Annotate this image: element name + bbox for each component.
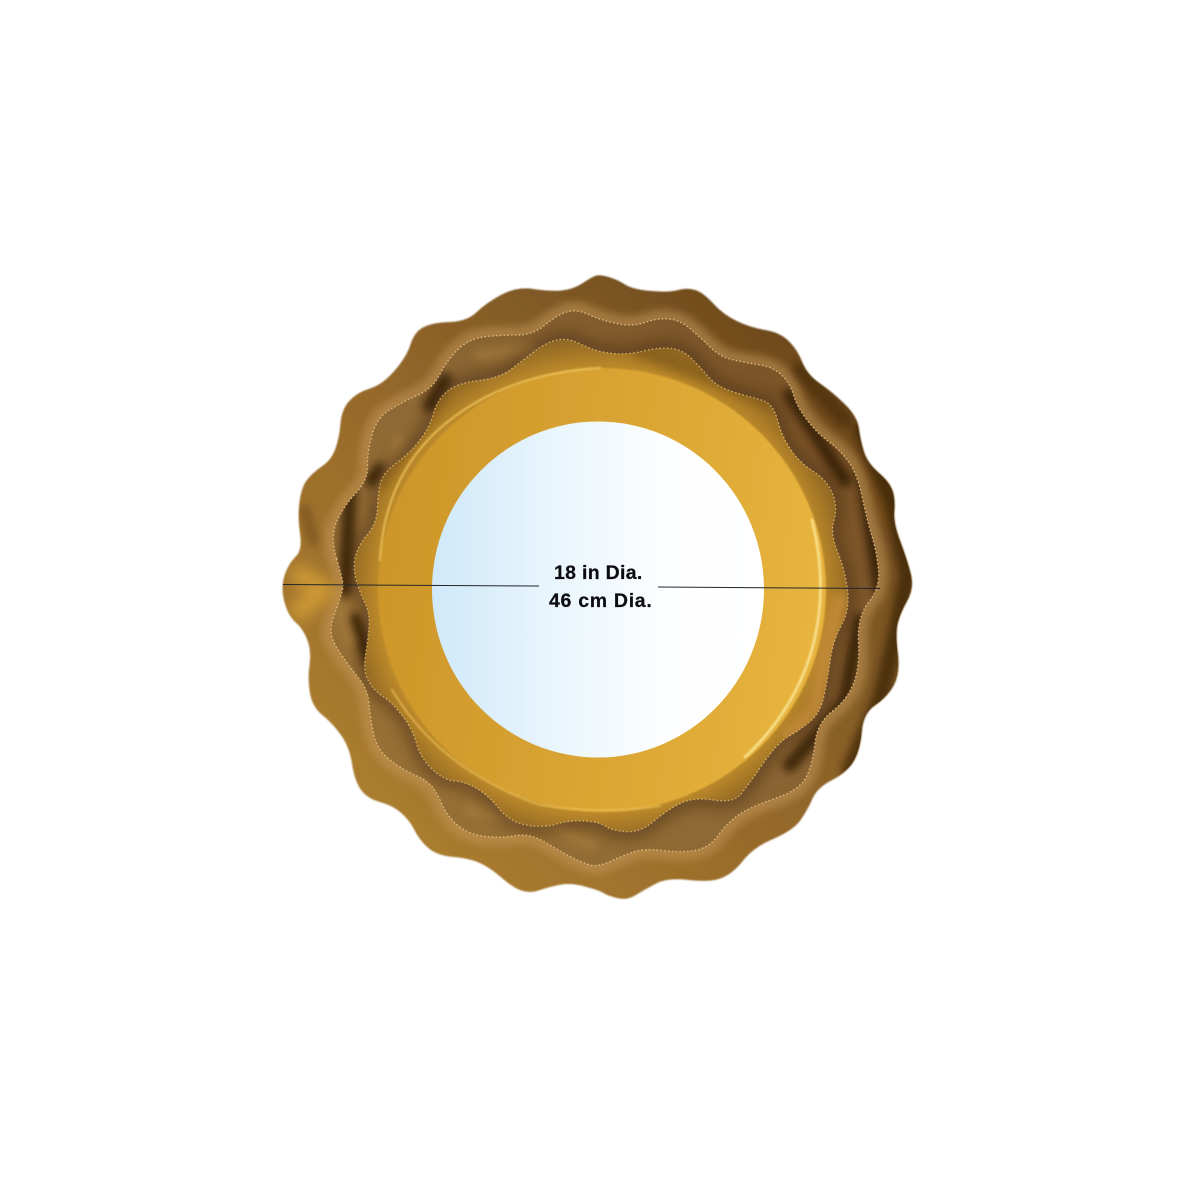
diameter label [549,562,652,612]
middle scalloped layer [331,311,880,866]
diameter label: 18 in Dia. [554,562,643,584]
outer scalloped layer [283,276,912,898]
dimension line: right [658,587,880,588]
gold inner disc [378,368,826,812]
round mirror glass [432,422,764,758]
diameter label: 46 cm Dia. [549,590,652,612]
mirror frame [283,276,912,898]
dimension line: left [283,584,539,586]
inner scalloped layer [354,339,848,832]
